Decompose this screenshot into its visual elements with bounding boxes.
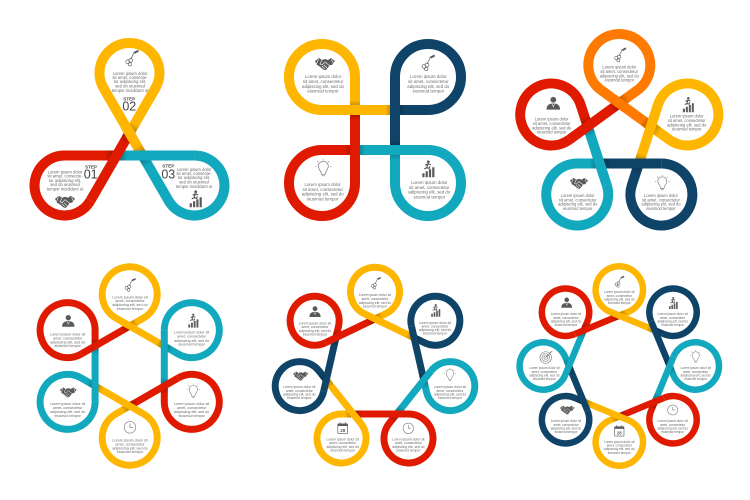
- petal: yellow handshake: [275, 30, 401, 156]
- text: bottom yellow description: amet, consectetur: [115, 442, 145, 446]
- label: step 01: 01: [84, 168, 98, 182]
- text: step 02 description: sed do eiusmod: [115, 84, 145, 88]
- text: left teal description: adipiscing elit, sed do: [529, 373, 560, 377]
- icon: business person: [62, 315, 75, 327]
- text: upper-left red description: adipiscing elit, sed do: [551, 319, 581, 323]
- icon: handshake: [315, 58, 335, 70]
- icon: clock: [668, 405, 678, 415]
- text: right teal description: eiusmod tempor: [178, 343, 206, 347]
- text: left teal description: eiusmod tempor: [54, 414, 82, 418]
- petal: lower-right red clock: [616, 372, 707, 463]
- petal: right teal bulb: [393, 351, 480, 431]
- petal: left red person: [30, 285, 133, 381]
- text: red description: Lorem ipsum dolor: [535, 117, 569, 122]
- petal: right teal runner: [131, 293, 234, 389]
- petal: upper-right navy runner: [382, 286, 480, 383]
- text: navy description: adipiscing elit, sed do: [407, 84, 450, 89]
- icon: business person: [547, 97, 560, 110]
- panel: three-step loop: [24, 43, 235, 226]
- text: step 02 description: tempor incididunt ut: [112, 88, 149, 93]
- text: navy description: sit amet, consectetur: [642, 197, 681, 202]
- text: red description: adipiscing elit, sed do: [302, 192, 344, 196]
- text: top yellow description: adipiscing elit, sed do: [359, 301, 391, 305]
- icon: robot arm: [615, 47, 626, 62]
- text: right teal description: Lorem ipsum dolor sit: [680, 366, 711, 370]
- text: bottom yellow description: adipiscing elit, sed do: [604, 447, 635, 451]
- petal: navy robot arm: [349, 30, 475, 156]
- text: top yellow description: eiusmod tempor: [363, 304, 388, 308]
- icon: light bulb: [187, 384, 200, 397]
- text: orange description: Lorem ipsum dolor: [602, 65, 637, 70]
- text: left navy description: adipiscing elit, sed do: [283, 392, 316, 396]
- petal: lower-left navy handshake: [523, 363, 613, 453]
- text: teal description: eiusmod tempor: [414, 194, 446, 200]
- text: upper-left red description: Lorem ipsum dolor sit: [299, 322, 331, 326]
- text: red description: eiusmod tempor: [307, 196, 339, 202]
- text: navy description: Lorem ipsum dolor: [644, 193, 679, 198]
- text: top yellow description: Lorem ipsum dolor sit: [359, 293, 391, 297]
- text: top yellow description: Lorem ipsum dolor sit: [112, 295, 148, 299]
- text: navy description: adipiscing elit, sed do: [641, 202, 681, 207]
- text: lower-left yellow description: adipiscing elit, sed do: [326, 445, 359, 449]
- text: left teal description: Lorem ipsum dolor sit: [529, 366, 560, 370]
- text: upper-left red description: eiusmod tempor: [303, 332, 328, 336]
- text: yellow description: Lorem ipsum dolor: [670, 114, 704, 119]
- petal: left teal target: [520, 329, 587, 390]
- label: step 03: STEP: [162, 164, 174, 169]
- petal: lower-right red clock: [351, 384, 441, 478]
- icon: runner and bars: [190, 190, 202, 207]
- text: lower-right red description: amet, consectetur: [660, 423, 686, 427]
- text: upper-right navy description: Lorem ipsum dolor sit: [657, 312, 688, 316]
- text: lower-left yellow description: eiusmod tempor: [331, 448, 356, 452]
- text: lower-left navy description: adipiscing elit, sed do: [551, 426, 581, 430]
- text: step 01 description: sit amet, consecte-: [47, 174, 83, 179]
- icon: handshake: [293, 372, 308, 380]
- text: bottom yellow description: amet, consectetur: [607, 443, 633, 447]
- petal: teal handshake: [531, 121, 641, 238]
- text: bottom yellow description: Lorem ipsum dolor sit: [604, 440, 635, 444]
- text: orange description: sit amet, consectetur: [600, 69, 639, 74]
- petal: top yellow robot arm: [596, 266, 656, 333]
- text: lower-right red description: Lorem ipsum dolor sit: [657, 419, 688, 423]
- text: navy description: sit amet, consectetur: [408, 79, 449, 84]
- petal: right red bulb: [126, 351, 229, 447]
- petal: step 02: [100, 43, 160, 158]
- petal: upper-left red person: [280, 274, 378, 371]
- text: red description: eiusmod tempor: [537, 130, 567, 135]
- text: step 03 description: sit amet, consecte-: [176, 171, 212, 176]
- icon: robot arm: [615, 276, 624, 287]
- icon: calendar: [615, 425, 624, 436]
- text: lower-right red description: Lorem ipsum dolor sit: [392, 438, 425, 442]
- petal: top yellow robot arm: [102, 267, 166, 349]
- text: top yellow description: amet, consectetur: [362, 297, 389, 301]
- text: upper-right navy description: amet, consectetur: [660, 316, 686, 320]
- text: navy description: Lorem ipsum dolor: [410, 74, 447, 79]
- text: teal description: adipiscing elit, sed do: [558, 202, 598, 207]
- petal: left teal handshake: [26, 343, 129, 439]
- text: orange description: adipiscing elit, sed do: [600, 73, 640, 78]
- icon: light bulb: [315, 159, 331, 176]
- text: step 01 description: Lorem ipsum dolor: [48, 170, 83, 174]
- text: step 03 description: sed do eiusmod: [179, 180, 209, 184]
- icon: handshake: [560, 406, 574, 414]
- text: top yellow description: adipiscing elit, sed do: [604, 297, 635, 301]
- text: teal description: adipiscing elit, sed do: [408, 190, 451, 194]
- icon: handshake: [55, 196, 75, 208]
- text: lower-right red description: adipiscing elit, sed do: [392, 445, 425, 449]
- petal: top yellow robot arm: [350, 267, 416, 341]
- text: right teal description: Lorem ipsum dolor sit: [434, 385, 466, 389]
- text: right teal description: adipiscing elit, sed do: [434, 392, 466, 396]
- petal: lower-left yellow calendar: [294, 377, 385, 471]
- text: teal description: sit amet, consectetur: [559, 197, 597, 202]
- text: yellow description: adipiscing elit, sed do: [302, 84, 345, 89]
- icon: clock: [124, 421, 136, 433]
- text: left red description: eiusmod tempor: [54, 344, 82, 348]
- text: upper-right navy description: adipiscing elit, sed do: [419, 328, 451, 332]
- text: step 02 description: sit amet, consecte-: [112, 75, 148, 80]
- text: yellow description: adipiscing elit, sed do: [667, 122, 707, 127]
- text: bottom yellow description: eiusmod tempor: [608, 451, 632, 455]
- petal: bottom yellow calendar: [582, 399, 643, 466]
- text: step 02 description: Lorem ipsum dolor: [113, 71, 148, 76]
- text: upper-left red description: eiusmod tempor: [555, 323, 578, 327]
- text: bottom yellow description: eiusmod tempor: [117, 450, 144, 454]
- text: right teal description: eiusmod tempor: [438, 396, 463, 400]
- text: step 01 description: tur adipiscing elit,: [49, 178, 81, 183]
- icon: runner and bars: [422, 160, 434, 177]
- text: teal description: eiusmod tempor: [563, 206, 593, 211]
- text: red description: sit amet, consectetur: [302, 187, 343, 192]
- text: upper-left red description: amet, consectetur: [553, 316, 580, 320]
- text: top yellow description: amet, consectetur: [115, 299, 145, 303]
- text: right teal description: eiusmod tempor: [684, 377, 708, 381]
- icon: target: [540, 351, 552, 363]
- text: upper-right navy description: eiusmod tempor: [423, 332, 448, 336]
- text: lower-right red description: eiusmod tempor: [661, 430, 685, 434]
- text: teal description: Lorem ipsum dolor: [411, 180, 448, 185]
- panel: five-petal loop: [512, 34, 728, 240]
- text: right red description: amet, consectetur: [177, 406, 207, 410]
- text: upper-right navy description: Lorem ipsum dolor sit: [419, 321, 451, 325]
- text: right teal description: adipiscing elit, sed do: [174, 339, 209, 343]
- panel: eight-petal loop: [520, 266, 719, 466]
- icon: robot arm: [126, 50, 139, 66]
- text: right teal description: amet, consectetur: [683, 370, 709, 374]
- text: left teal description: Lorem ipsum dolor sit: [50, 402, 85, 406]
- text: left navy description: eiusmod tempor: [287, 396, 312, 400]
- icon: light bulb: [655, 175, 670, 190]
- icon: clock: [403, 423, 414, 434]
- text: left teal description: amet, consectetur: [53, 406, 83, 410]
- icon: robot arm: [125, 278, 136, 291]
- petal: step 01: [24, 117, 153, 226]
- text: top yellow description: eiusmod tempor: [117, 307, 144, 311]
- text: step 03 description: tempor incididunt ut: [176, 184, 213, 189]
- text: top yellow description: eiusmod tempor: [608, 301, 632, 305]
- icon: robot arm: [422, 54, 435, 71]
- text: top yellow description: adipiscing elit, sed do: [112, 303, 148, 307]
- text: yellow description: sit amet, consectetur: [303, 79, 344, 84]
- text: yellow description: eiusmod tempor: [307, 88, 339, 94]
- text: lower-left navy description: eiusmod tempor: [555, 430, 578, 434]
- petal: upper-left red person: [532, 269, 622, 360]
- text: right red description: adipiscing elit, sed do: [174, 410, 209, 414]
- text: upper-left red description: Lorem ipsum dolor sit: [551, 312, 581, 316]
- text: left navy description: Lorem ipsum dolor sit: [283, 385, 316, 389]
- text: left navy description: amet, consectetur: [286, 389, 314, 393]
- panel: six-petal loop: [26, 267, 234, 465]
- panel: seven-petal loop: [267, 267, 480, 478]
- text: yellow description: eiusmod tempor: [672, 127, 702, 132]
- text: left red description: adipiscing elit, sed do: [50, 340, 85, 344]
- text: left red description: Lorem ipsum dolor sit: [50, 332, 85, 336]
- label: step 02: 02: [122, 100, 136, 114]
- text: right teal description: adipiscing elit, sed do: [680, 373, 711, 377]
- text: step 01 description: sed do eiusmod: [50, 182, 80, 187]
- text: orange description: eiusmod tempor: [605, 78, 635, 83]
- text: upper-right navy description: amet, consectetur: [422, 324, 449, 328]
- text: step 03 description: tur adipiscing elit,: [178, 175, 210, 180]
- text: right red description: eiusmod tempor: [178, 414, 206, 418]
- text: right teal description: Lorem ipsum dolor sit: [174, 331, 209, 335]
- text: lower-right red description: adipiscing elit, sed do: [657, 426, 688, 430]
- text: upper-left red description: amet, consectetur: [302, 325, 329, 329]
- text: lower-left navy description: amet, consectetur: [553, 423, 580, 427]
- text: red description: Lorem ipsum dolor: [305, 182, 341, 187]
- text: lower-left navy description: Lorem ipsum dolor sit: [551, 419, 581, 423]
- text: right red description: Lorem ipsum dolor sit: [174, 402, 209, 406]
- text: upper-right navy description: adipiscing elit, sed do: [657, 319, 688, 323]
- petal: navy bulb: [595, 123, 705, 240]
- icon: handshake: [570, 178, 588, 189]
- text: top yellow description: amet, consectetur: [607, 294, 633, 298]
- icon: runner and bars: [188, 314, 198, 328]
- petal: bottom yellow clock: [93, 383, 157, 465]
- text: lower-right red description: eiusmod tempor: [396, 448, 421, 452]
- text: left teal description: adipiscing elit, sed do: [50, 410, 85, 414]
- label: step 03: 03: [161, 168, 175, 182]
- text: step 02 description: tur adipiscing elit,: [114, 79, 146, 84]
- icon: calendar: [338, 422, 348, 434]
- petal: upper-right navy runner: [626, 279, 716, 369]
- text: step 03 description: Lorem ipsum dolor: [177, 167, 212, 172]
- icon: business person: [561, 298, 572, 308]
- icon: handshake: [60, 387, 77, 397]
- panel: four-petal loop: [275, 30, 475, 230]
- petal: teal runner: [349, 104, 475, 230]
- icon: business person: [309, 306, 321, 317]
- text: teal description: sit amet, consectetur: [409, 185, 450, 190]
- petal: red bulb: [275, 104, 401, 230]
- text: lower-left yellow description: amet, consectetur: [329, 441, 357, 445]
- icon: light bulb: [444, 368, 456, 380]
- text: lower-left yellow description: Lorem ipsum dolor sit: [326, 438, 359, 442]
- text: bottom yellow description: Lorem ipsum dolor sit: [112, 439, 148, 443]
- petal: step 03: [106, 117, 235, 226]
- text: right teal description: amet, consectetur: [177, 335, 207, 339]
- petal: left navy handshake: [267, 336, 353, 415]
- text: top yellow description: Lorem ipsum dolor sit: [604, 290, 635, 294]
- text: navy description: eiusmod tempor: [646, 206, 676, 211]
- text: left teal description: amet, consectetur: [532, 370, 558, 374]
- text: left teal description: eiusmod tempor: [533, 377, 557, 381]
- text: right teal description: amet, consectetur: [437, 389, 464, 393]
- text: red description: sit amet, consectetur: [533, 121, 571, 126]
- text: upper-right navy description: eiusmod tempor: [661, 323, 685, 327]
- text: step 01 description: tempor incididunt ut: [47, 186, 84, 192]
- icon: runner and bars: [431, 304, 440, 317]
- petal: orange robot arm: [588, 34, 654, 130]
- text: bottom yellow description: adipiscing elit, sed do: [112, 446, 148, 450]
- petal: red person: [512, 72, 624, 164]
- text: yellow description: sit amet, consectetur: [668, 118, 706, 123]
- petal: yellow runner: [616, 75, 728, 168]
- text: red description: adipiscing elit, sed do: [532, 125, 572, 130]
- label: step 02: STEP: [123, 97, 135, 102]
- text: left red description: amet, consectetur: [53, 336, 83, 340]
- icon: light bulb: [690, 350, 701, 362]
- icon: runner and bars: [683, 97, 694, 112]
- petal: right teal bulb: [652, 342, 719, 403]
- icon: runner and bars: [669, 297, 678, 309]
- text: yellow description: Lorem ipsum dolor: [305, 74, 342, 79]
- text: upper-left red description: adipiscing elit, sed do: [299, 329, 331, 333]
- label: step 01: STEP: [85, 164, 97, 169]
- text: navy description: eiusmod tempor: [413, 88, 445, 94]
- text: teal description: Lorem ipsum dolor: [561, 193, 595, 198]
- text: lower-right red description: amet, consectetur: [395, 441, 423, 445]
- icon: robot arm: [371, 277, 381, 289]
